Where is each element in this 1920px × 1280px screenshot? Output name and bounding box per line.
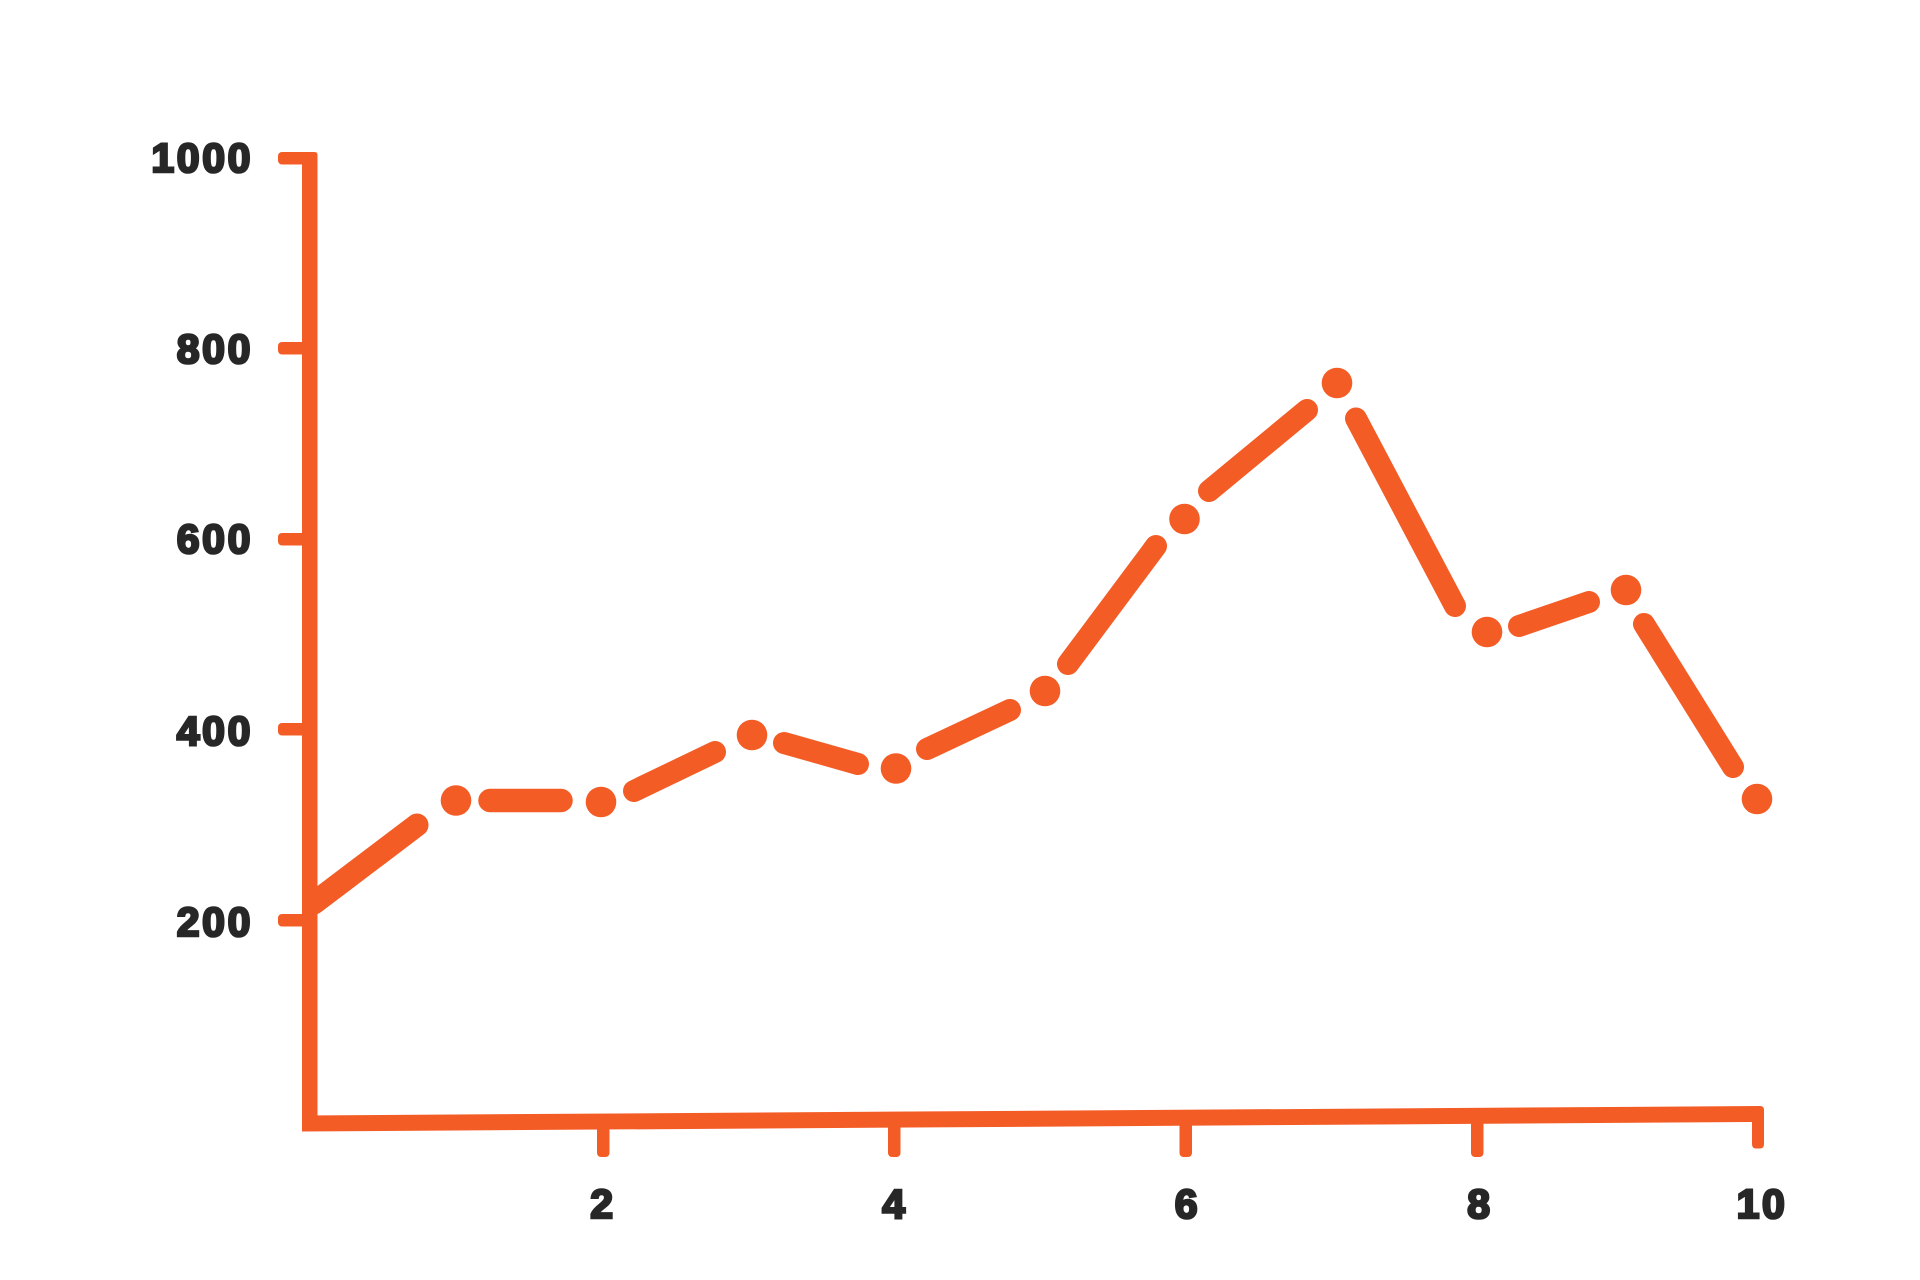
y axis labels: 600 bbox=[177, 516, 253, 562]
y axis labels: 400 bbox=[177, 708, 253, 754]
x axis labels: 6 bbox=[1175, 1181, 1200, 1227]
y axis labels bbox=[151, 135, 253, 945]
x axis labels: 4 bbox=[882, 1181, 908, 1227]
y axis with ticks bbox=[278, 152, 318, 1125]
x axis with ticks bbox=[302, 1106, 1764, 1157]
x axis labels: 8 bbox=[1467, 1181, 1493, 1227]
x axis labels: 2 bbox=[590, 1181, 616, 1227]
data line: dashes and dots bbox=[314, 368, 1772, 903]
x axis labels: 10 bbox=[1737, 1181, 1787, 1227]
y axis labels: 1000 bbox=[151, 135, 253, 181]
y axis labels: 800 bbox=[177, 326, 253, 372]
x axis labels bbox=[590, 1181, 1787, 1227]
y axis labels: 200 bbox=[177, 899, 253, 945]
